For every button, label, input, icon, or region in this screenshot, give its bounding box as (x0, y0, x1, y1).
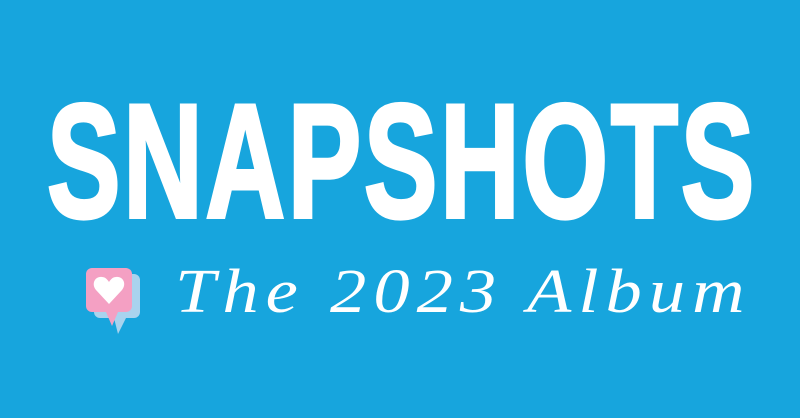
icon: heart speech bubble (86, 268, 140, 334)
subtitle: The 2023 Album (175, 258, 752, 326)
title: SNAPSHOTS (47, 71, 757, 252)
